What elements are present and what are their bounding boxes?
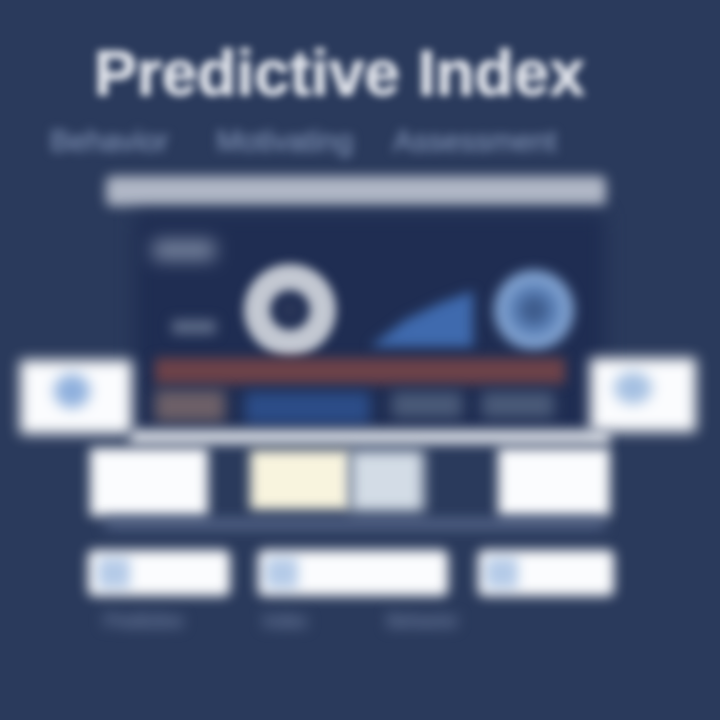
title: Predictive Index: [94, 37, 585, 109]
progress bar: [106, 176, 606, 206]
pill one: [88, 550, 230, 596]
red band: [155, 358, 565, 384]
right callout card: [590, 358, 696, 432]
card two extension: [350, 450, 424, 512]
card two: [250, 450, 350, 510]
left callout card: [20, 360, 132, 434]
left small label: [172, 320, 216, 334]
lower stat blocks: [155, 390, 225, 422]
pill two: [258, 550, 448, 596]
card captions: [105, 520, 605, 528]
horizontal connector bar: [130, 430, 610, 444]
pill three: [478, 550, 614, 596]
small blue ring chart: [486, 262, 582, 356]
subtitle row: Behavior Motivating Assessment: [50, 125, 557, 158]
chart labels: [153, 240, 215, 260]
ring chart: [236, 256, 344, 360]
area chart: [369, 286, 480, 354]
dark dashboard panel: [135, 214, 605, 434]
card one: [90, 448, 208, 516]
pill captions: Predictive Index Behavior: [104, 611, 458, 631]
card three: [498, 448, 610, 516]
